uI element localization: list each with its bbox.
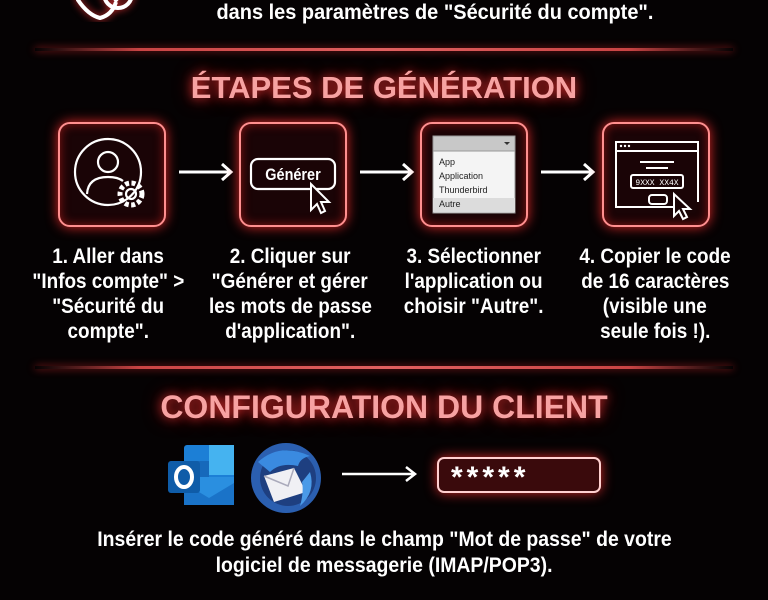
password field: ***** — [451, 461, 529, 494]
step 1 text: compte". — [67, 320, 149, 343]
step 3 text: 3. Sélectionner — [407, 245, 541, 268]
step 2 text: les mots de passe — [209, 295, 371, 318]
icon: thunderbird — [251, 443, 321, 513]
step 4 text: seule fois !). — [600, 320, 710, 343]
arrow 3 — [541, 163, 596, 181]
step 2 text: d'application". — [225, 320, 355, 343]
step 2 text: "Générer et gérer — [212, 270, 368, 293]
step 2 box: Générer — [265, 166, 321, 184]
step 3 text: choisir "Autre". — [404, 295, 544, 318]
icon: outlook — [168, 445, 234, 505]
step 4 text — [579, 245, 731, 343]
step 4 text: 4. Copier le code — [579, 245, 731, 268]
step 1 text — [32, 245, 184, 343]
step 2 box — [239, 122, 347, 227]
step 1 text: "Sécurité du — [52, 295, 164, 318]
step 1 box — [58, 122, 166, 227]
step 3 box: Thunderbird — [439, 185, 488, 195]
arrow 2 — [360, 163, 414, 181]
step 3 box: Autre — [439, 199, 461, 209]
step 3 box: App — [439, 157, 455, 167]
arrow 1 — [179, 163, 234, 181]
bottom text: logiciel de messagerie (IMAP/POP3). — [216, 554, 552, 577]
bottom text — [97, 528, 671, 577]
heading: configuration: CONFIGURATION DU CLIENT — [160, 389, 608, 425]
bottom text: Insérer le code généré dans le champ "Mot de passe" de votre — [97, 528, 671, 551]
step 4 text: (visible une — [603, 295, 707, 318]
icon: shield — [70, 0, 139, 22]
arrow: client — [342, 466, 417, 482]
step 3 text — [404, 245, 544, 318]
step 2 text: 2. Cliquer sur — [230, 245, 350, 268]
step 4 box — [602, 122, 710, 227]
step 4 box: 9XXX XX4X — [635, 179, 679, 188]
step 1 text: "Infos compte" > — [32, 270, 184, 293]
password field — [437, 457, 601, 493]
top text: dans les paramètres de "Sécurité du compte". — [216, 1, 653, 24]
step 1 text: 1. Aller dans — [52, 245, 164, 268]
heading: étapes: ÉTAPES DE GÉNÉRATION — [191, 70, 577, 105]
step 4 text: de 16 caractères — [581, 270, 729, 293]
step 3 box: Application — [439, 171, 483, 181]
step 3 box — [420, 122, 528, 227]
step 2 text — [209, 245, 372, 343]
step 3 text: l'application ou — [405, 270, 543, 293]
